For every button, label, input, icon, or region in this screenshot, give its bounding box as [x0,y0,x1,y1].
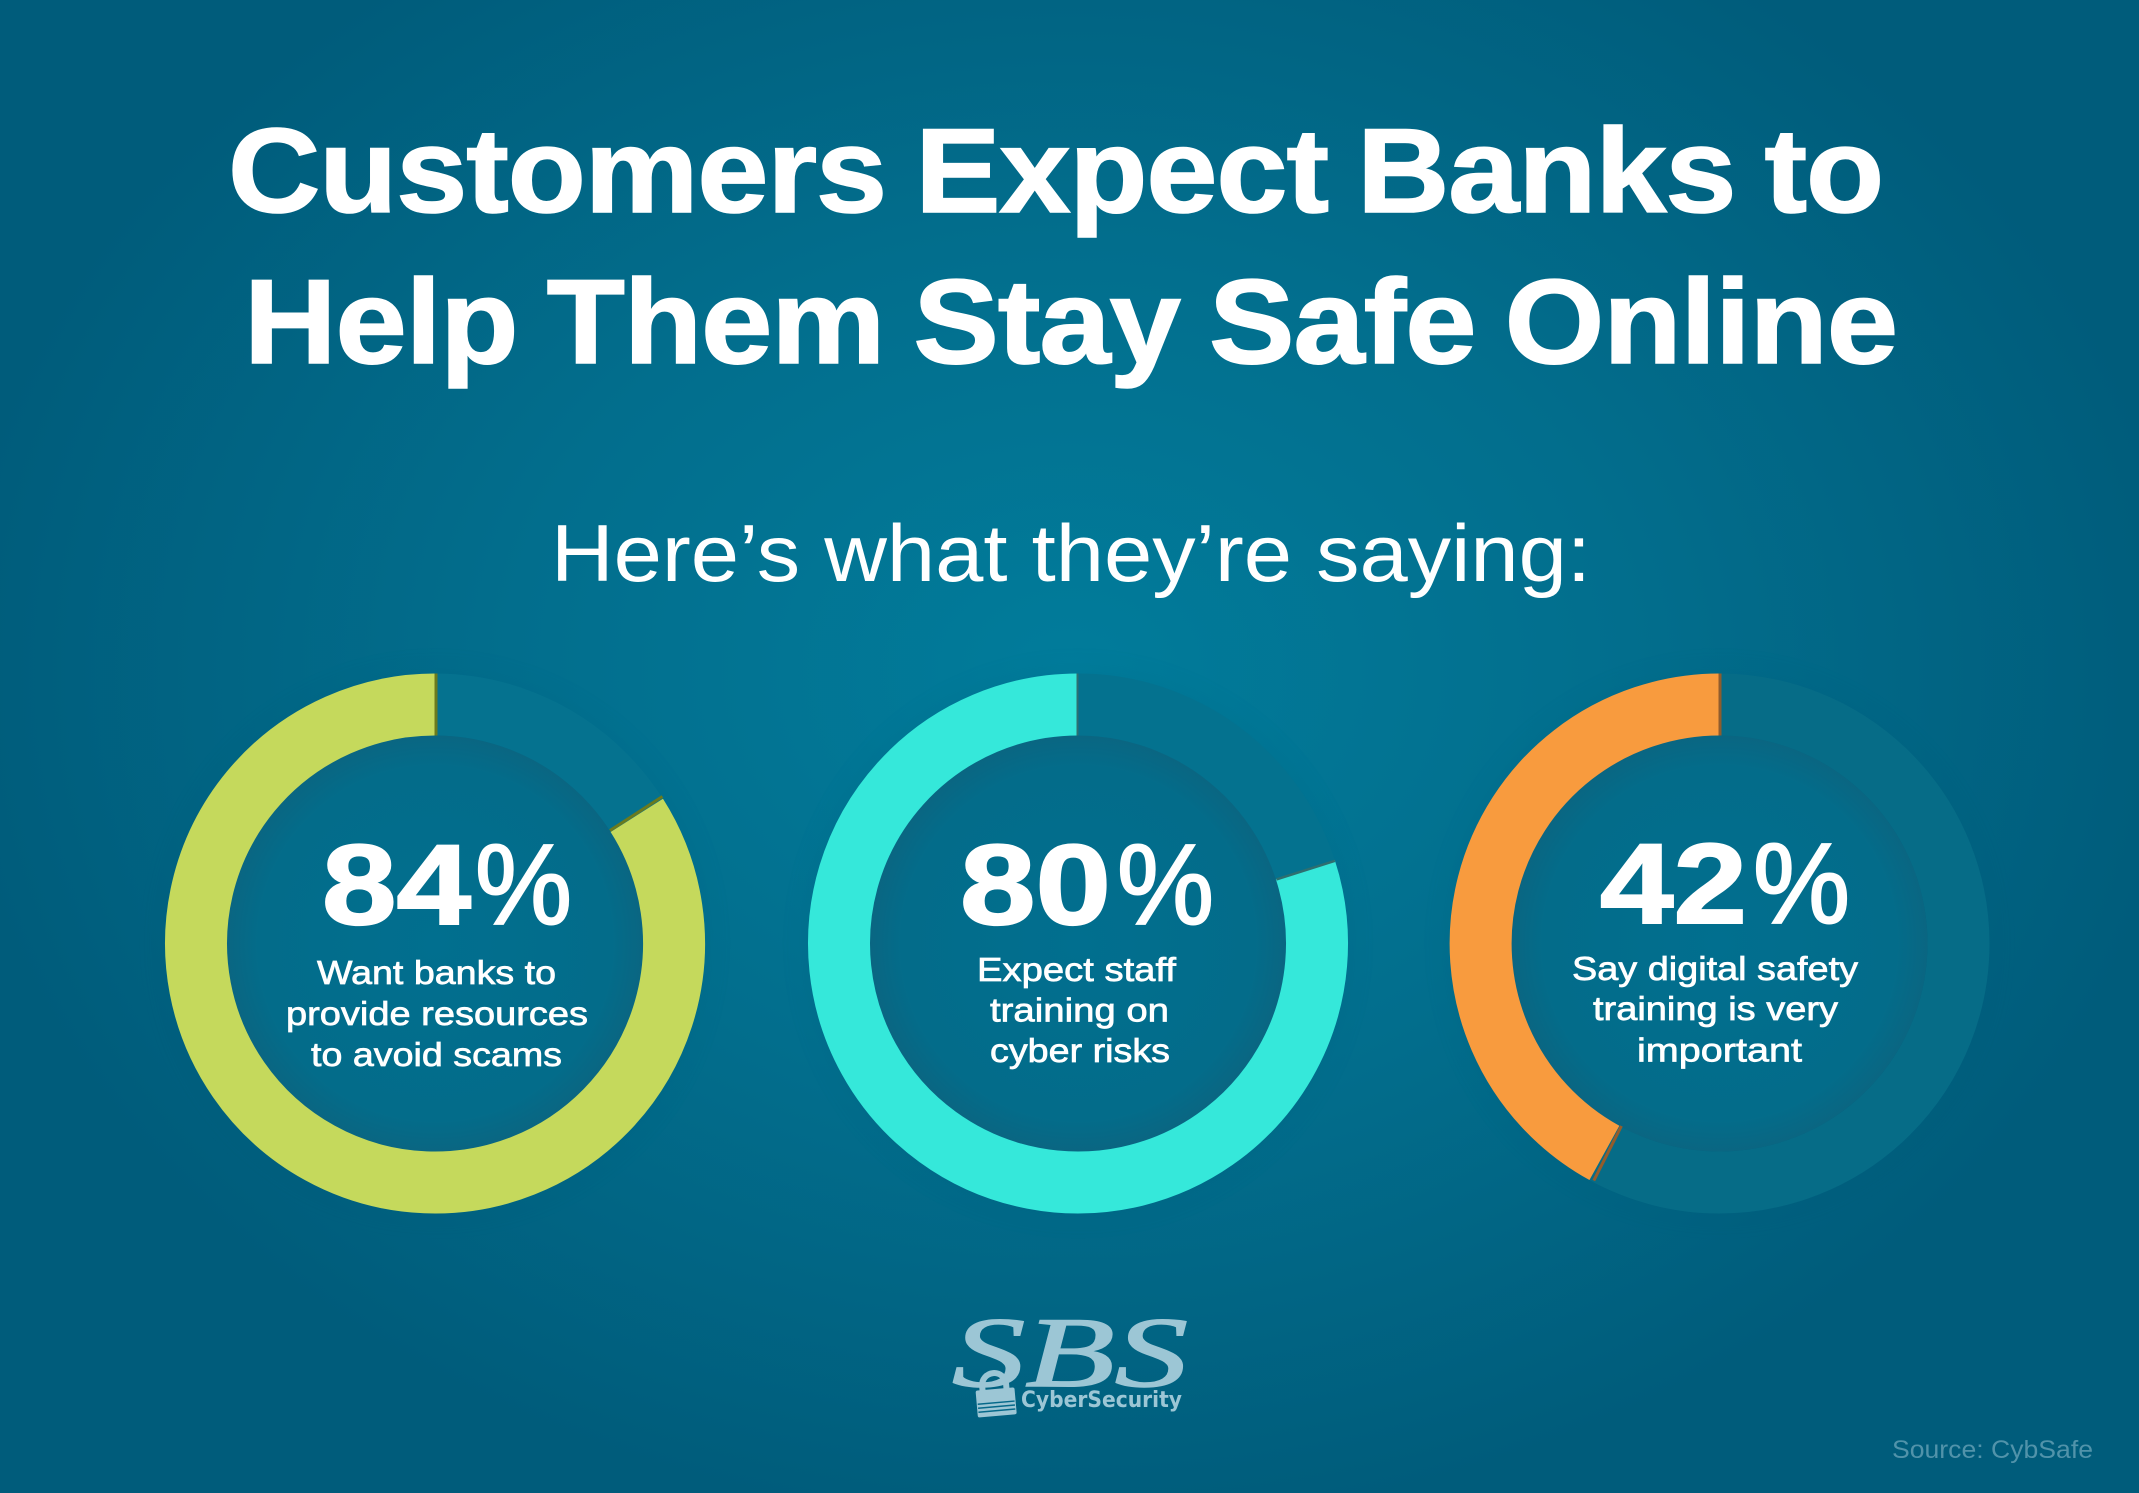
caption: 42%: training is very [1593,990,1839,1027]
caption: 84%: provide resources [286,995,588,1032]
subtitle: Here’s what they’re saying: [551,509,1591,599]
logo: SBS CyberSecurity: CyberSecurity [1021,1387,1182,1413]
icon: padlock [974,1371,1017,1418]
stat: 80%: 80 [960,822,1111,949]
caption: 80%: cyber risks [990,1032,1170,1069]
title [228,104,1897,389]
caption: 42% [1572,950,1859,1068]
panel: 42% donut [1448,672,1992,1216]
donut chart: 84 percent [163,672,707,1216]
stat: 84%: % [475,822,572,949]
caption: 84%: to avoid scams [311,1036,562,1073]
stat: 42% [1600,821,1850,948]
donut chart: 42 percent [1448,672,1992,1216]
stat: 80%: % [1117,822,1214,949]
caption: 80%: Expect staff [977,951,1177,988]
source note: Source: CybSafe [1892,1436,2093,1464]
caption: 42%: Say digital safety [1572,950,1859,987]
caption: 84%: Want banks to [317,954,556,991]
logo: SBS CyberSecurity [952,1297,1188,1418]
title: Help Them Stay Safe Online [244,255,1897,389]
stat: 42%: 42 [1600,821,1747,948]
stat: 84%: 84 [322,822,471,949]
panel: 84% donut [163,672,707,1216]
title: Customers Expect Banks to [228,104,1883,238]
caption: 42%: important [1637,1032,1802,1068]
panel: 80% donut [806,672,1350,1216]
donut chart: 80 percent [806,672,1350,1216]
stat: 84% [322,822,572,949]
caption: 80% [977,951,1177,1069]
caption: 84% [286,954,588,1073]
caption: 80%: training on [990,992,1169,1028]
logo: SBS CyberSecurity: SBS [952,1297,1188,1408]
stat: 80% [960,822,1214,949]
stat: 42%: % [1753,821,1850,948]
